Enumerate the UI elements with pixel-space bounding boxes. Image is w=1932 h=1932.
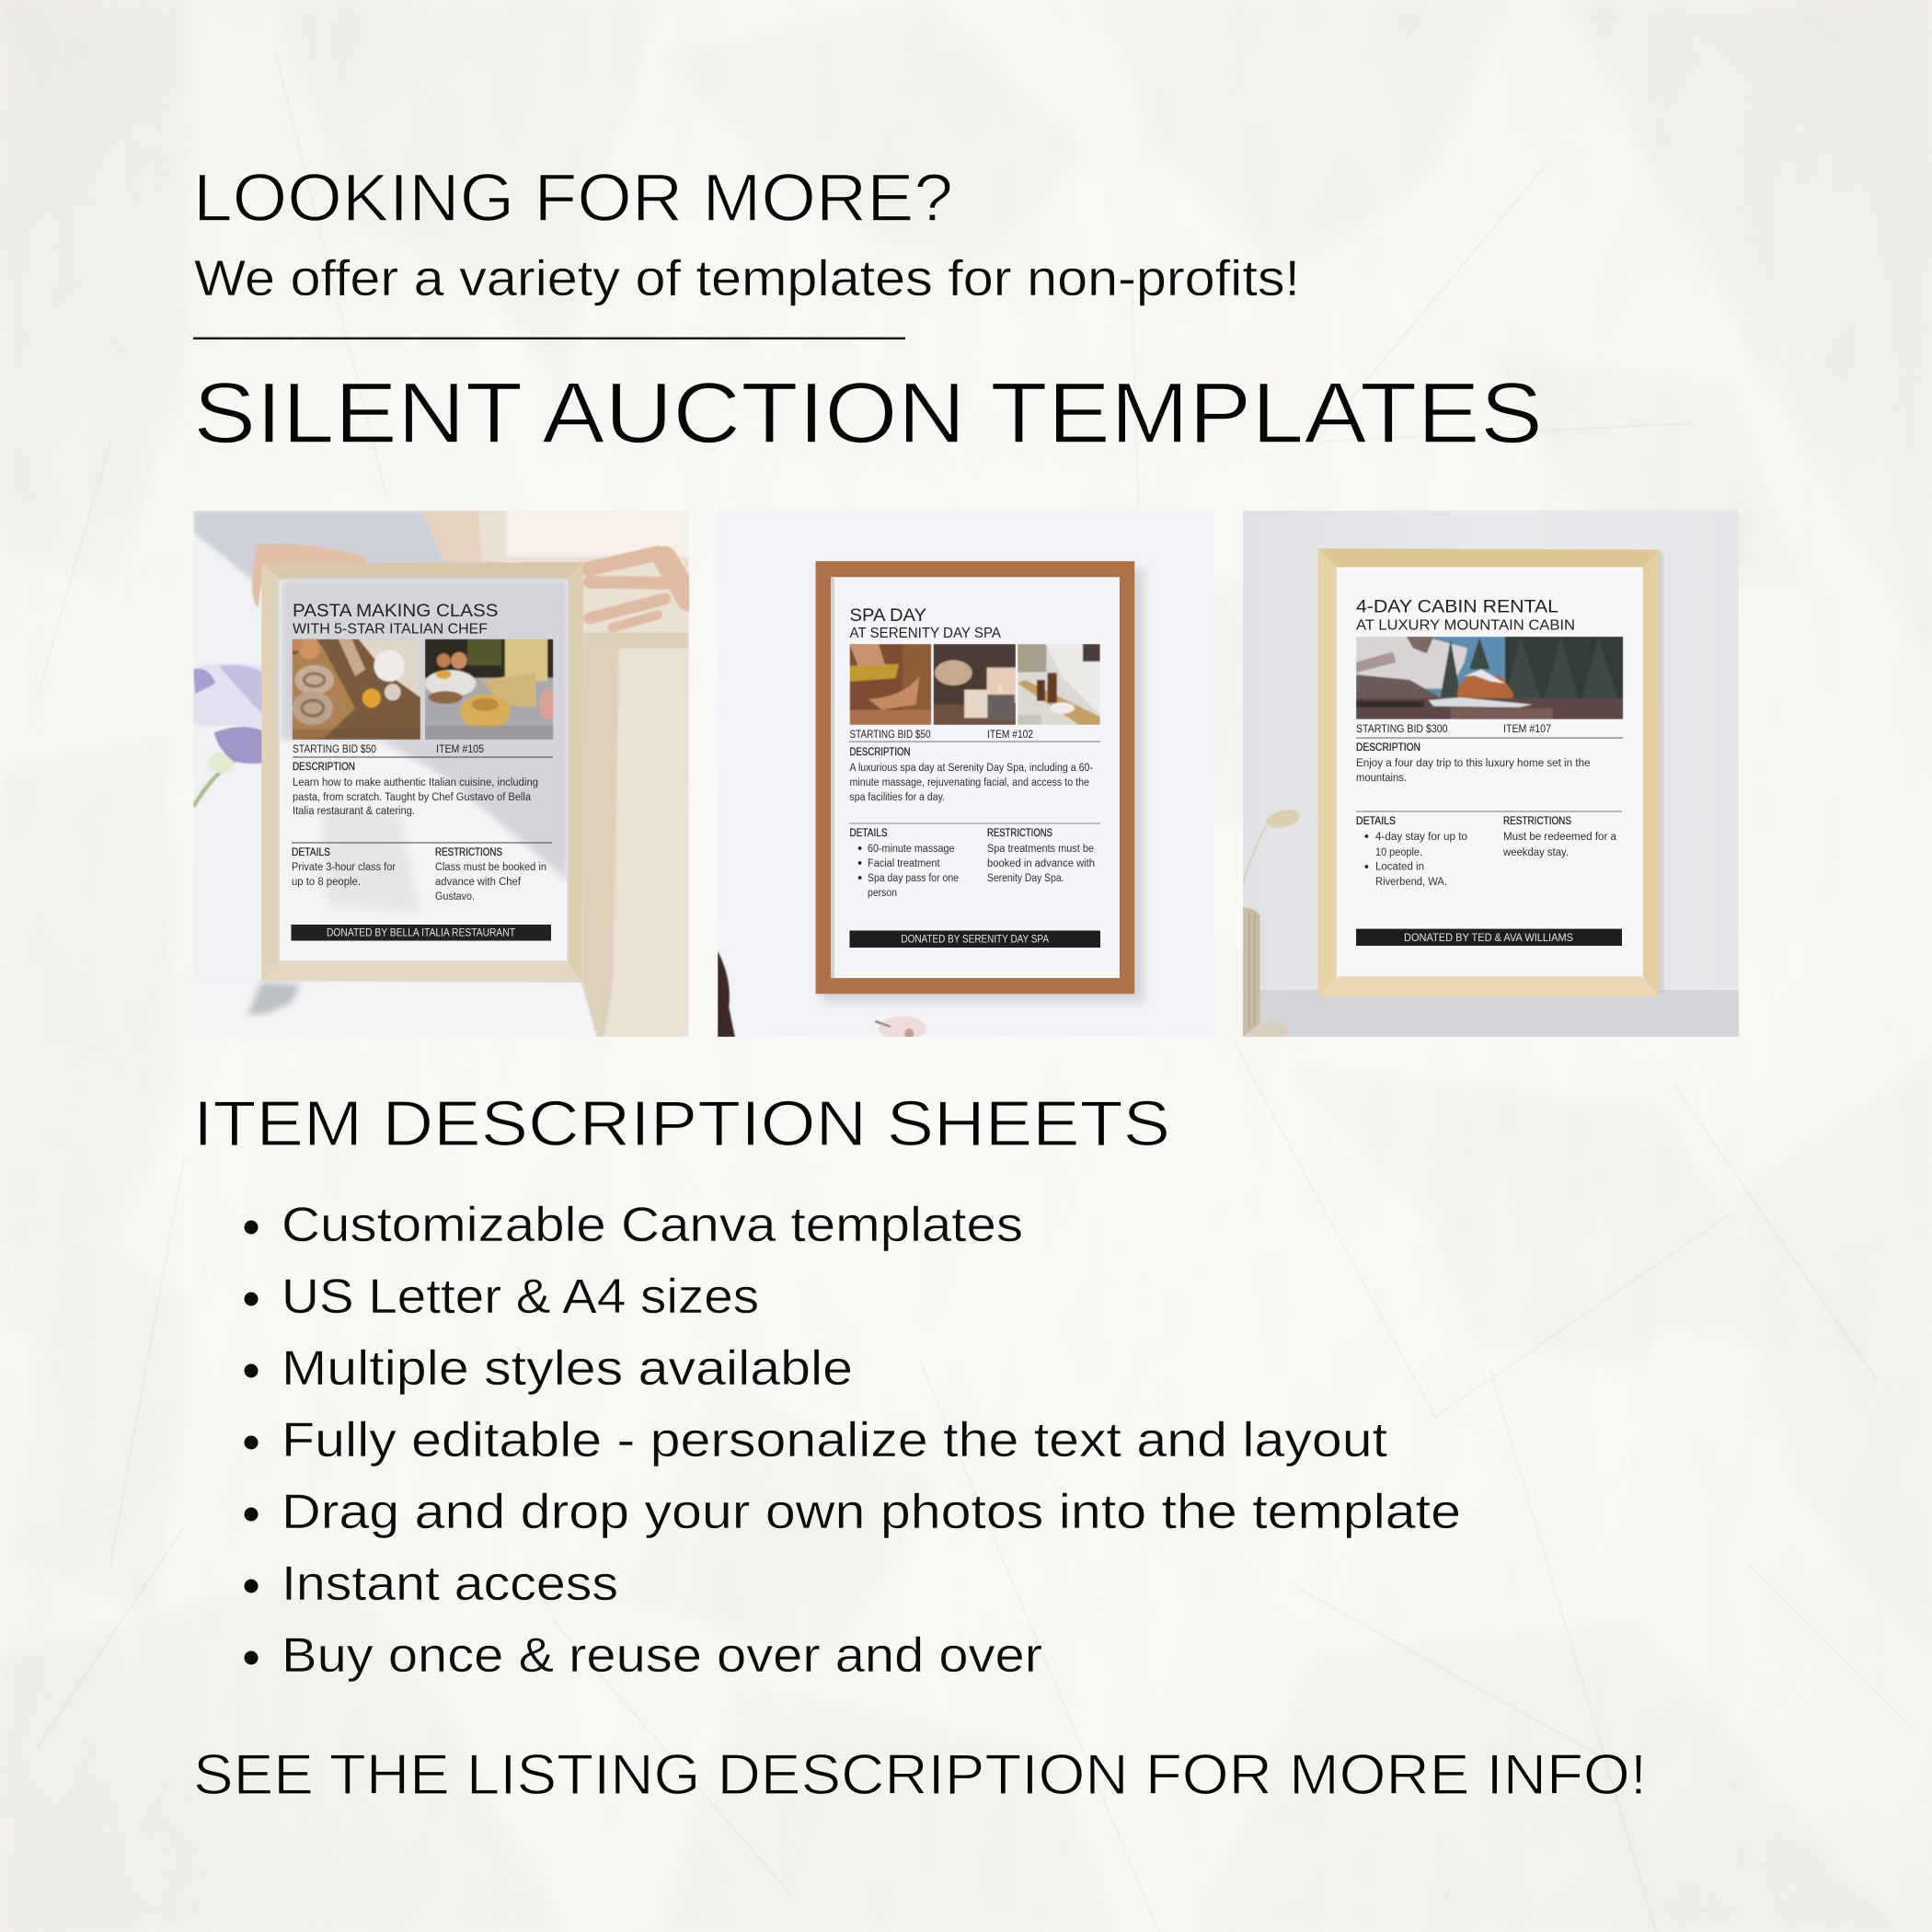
walnut frame: [816, 561, 1134, 994]
sheet body text: ITEM #107: [1503, 724, 1551, 735]
sheet body text: [850, 730, 1095, 899]
feature list: [245, 1198, 1461, 1683]
sheet body text: DESCRIPTION: [1356, 742, 1420, 753]
list items: Customizable Canva templates: [282, 1198, 1023, 1252]
sheet body text: 10 people.: [1375, 847, 1422, 858]
sheet subtitle: AT LUXURY MOUNTAIN CABIN: [1356, 618, 1575, 634]
sheet body text: Must be redeemed for a: [1503, 832, 1617, 843]
heading: silent auction templates: SILENT AUCTION TEMPLATES: [193, 364, 1543, 461]
sheet body text: Located in: [1375, 862, 1424, 873]
sheet body text: up to 8 people.: [292, 877, 361, 888]
frame shadow: [1658, 553, 1663, 994]
sheet body text: Class must be booked in: [435, 862, 546, 873]
sheet body text: STARTING BID $50: [850, 730, 931, 741]
list items: US Letter & A4 sizes: [282, 1270, 759, 1324]
pasta photo left: [288, 635, 420, 740]
dark hair at corner: [718, 951, 735, 1037]
sheet body text: Serenity Day Spa.: [987, 873, 1064, 884]
model clothing: [477, 511, 689, 1037]
donor bar: DONATED BY BELLA ITALIA RESTAURANT: [327, 928, 515, 939]
sheet body text: Riverbend, WA.: [1375, 877, 1447, 888]
sheet body text: Italia restaurant & catering.: [293, 806, 415, 817]
sheet body text: pasta, from scratch. Taught by Chef Gustavo of Bella: [293, 792, 532, 803]
sheet body text: booked in advance with: [987, 858, 1095, 869]
panel: spa day mockup: [718, 511, 1214, 1041]
blossom: [875, 1017, 926, 1041]
sheet body text: STARTING BID $50: [293, 744, 376, 755]
sheet body text: Facial treatment: [868, 858, 940, 869]
sheet body text: Learn how to make authentic Italian cuisine, including: [293, 777, 538, 788]
frame shadow: [822, 569, 1144, 1002]
sheet body text: STARTING BID $300: [1356, 724, 1448, 735]
sheet body text: DETAILS: [1356, 816, 1396, 827]
sheet rules: [292, 756, 553, 843]
paper with window light: [279, 580, 568, 961]
sheet body text: DETAILS: [850, 828, 888, 839]
donor bar: [850, 931, 1100, 948]
donor bar: [1356, 929, 1622, 946]
pasta photo right: [425, 639, 556, 740]
sheet body text: Private 3-hour class for: [292, 862, 396, 873]
sheet body text: [292, 744, 546, 903]
mountain cabin photo: [1356, 637, 1623, 719]
list items: Instant access: [282, 1557, 618, 1611]
sheet body text: DETAILS: [292, 847, 330, 858]
sheet body text: RESTRICTIONS: [987, 828, 1052, 839]
wall and table: [193, 511, 502, 1018]
sheet body text: person: [868, 888, 897, 899]
sheet bullets: [858, 846, 861, 880]
bath tray photo: [1018, 644, 1100, 725]
sheet body text: 4-day stay for up to: [1375, 832, 1467, 843]
sheet body text: Spa day pass for one: [868, 873, 959, 884]
panel: pasta making class mockup: [193, 511, 689, 1037]
light wood frame: [1317, 548, 1660, 996]
sheet body text: DESCRIPTION: [293, 762, 355, 773]
list items: Fully editable - personalize the text and layout: [282, 1413, 1387, 1467]
sheet title: 4-DAY CABIN RENTAL: [1356, 596, 1558, 616]
donor bar: [291, 925, 551, 940]
divider rule: [193, 337, 905, 339]
sheet body text: weekday stay.: [1502, 847, 1569, 858]
subheading: template variety: We offer a variety of templates for non-profits!: [194, 249, 1300, 306]
sheet body text: Gustavo.: [435, 891, 475, 903]
sheet bullets: [1365, 834, 1368, 868]
candles photo: [934, 644, 1016, 725]
sheet body text: RESTRICTIONS: [1503, 816, 1571, 827]
sheet body text: A luxurious spa day at Serenity Day Spa, including a 60-: [850, 763, 1093, 774]
sheet title: PASTA MAKING CLASS: [293, 601, 499, 621]
sheet subtitle: AT SERENITY DAY SPA: [850, 626, 1001, 641]
heading: item description sheets: ITEM DESCRIPTION SHEETS: [193, 1087, 1170, 1159]
sheet body text: DESCRIPTION: [850, 747, 911, 758]
heading: looking for more: LOOKING FOR MORE?: [193, 161, 953, 236]
sheet body text: 60-minute massage: [868, 844, 955, 855]
sheet body text: ITEM #105: [436, 744, 484, 755]
donor bar: DONATED BY TED & AVA WILLIAMS: [1404, 933, 1573, 944]
hands holding frame: [252, 511, 689, 627]
dried grass stem: [1243, 807, 1302, 884]
sheet body text: mountains.: [1356, 773, 1407, 784]
list items: Buy once & reuse over and over: [282, 1628, 1042, 1683]
list items: Drag and drop your own photos into the template: [282, 1485, 1461, 1539]
iris flower: [193, 664, 261, 808]
donor bar: DONATED BY SERENITY DAY SPA: [901, 935, 1049, 946]
sheet body text: ITEM #102: [987, 730, 1033, 741]
sheet body text: Spa treatments must be: [987, 844, 1094, 855]
sheet body text: advance with Chef: [435, 877, 522, 888]
sheet body text: minute massage, rejuvenating facial, and access to the: [850, 777, 1089, 788]
sheet body text: [1356, 724, 1617, 888]
massage photo: [850, 644, 931, 725]
ribbed vase: [1243, 907, 1288, 1039]
list bullets: [245, 1220, 258, 1665]
sheet body text: spa facilities for a day.: [850, 792, 945, 803]
sheet title: SPA DAY: [850, 605, 926, 626]
sheet rules: [1356, 738, 1623, 811]
footer call to action: SEE THE LISTING DESCRIPTION FOR MORE INFO!: [193, 1743, 1647, 1807]
list items: Multiple styles available: [282, 1341, 853, 1396]
sheet body text: RESTRICTIONS: [435, 847, 502, 858]
panel: cabin rental mockup: [1243, 511, 1739, 1039]
sheet body text: Enjoy a four day trip to this luxury home set in the: [1356, 758, 1590, 769]
sheet rules: [849, 742, 1100, 824]
wooden frame: [261, 562, 583, 983]
list items: [282, 1198, 1461, 1683]
sheet subtitle: WITH 5-STAR ITALIAN CHEF: [293, 622, 488, 637]
